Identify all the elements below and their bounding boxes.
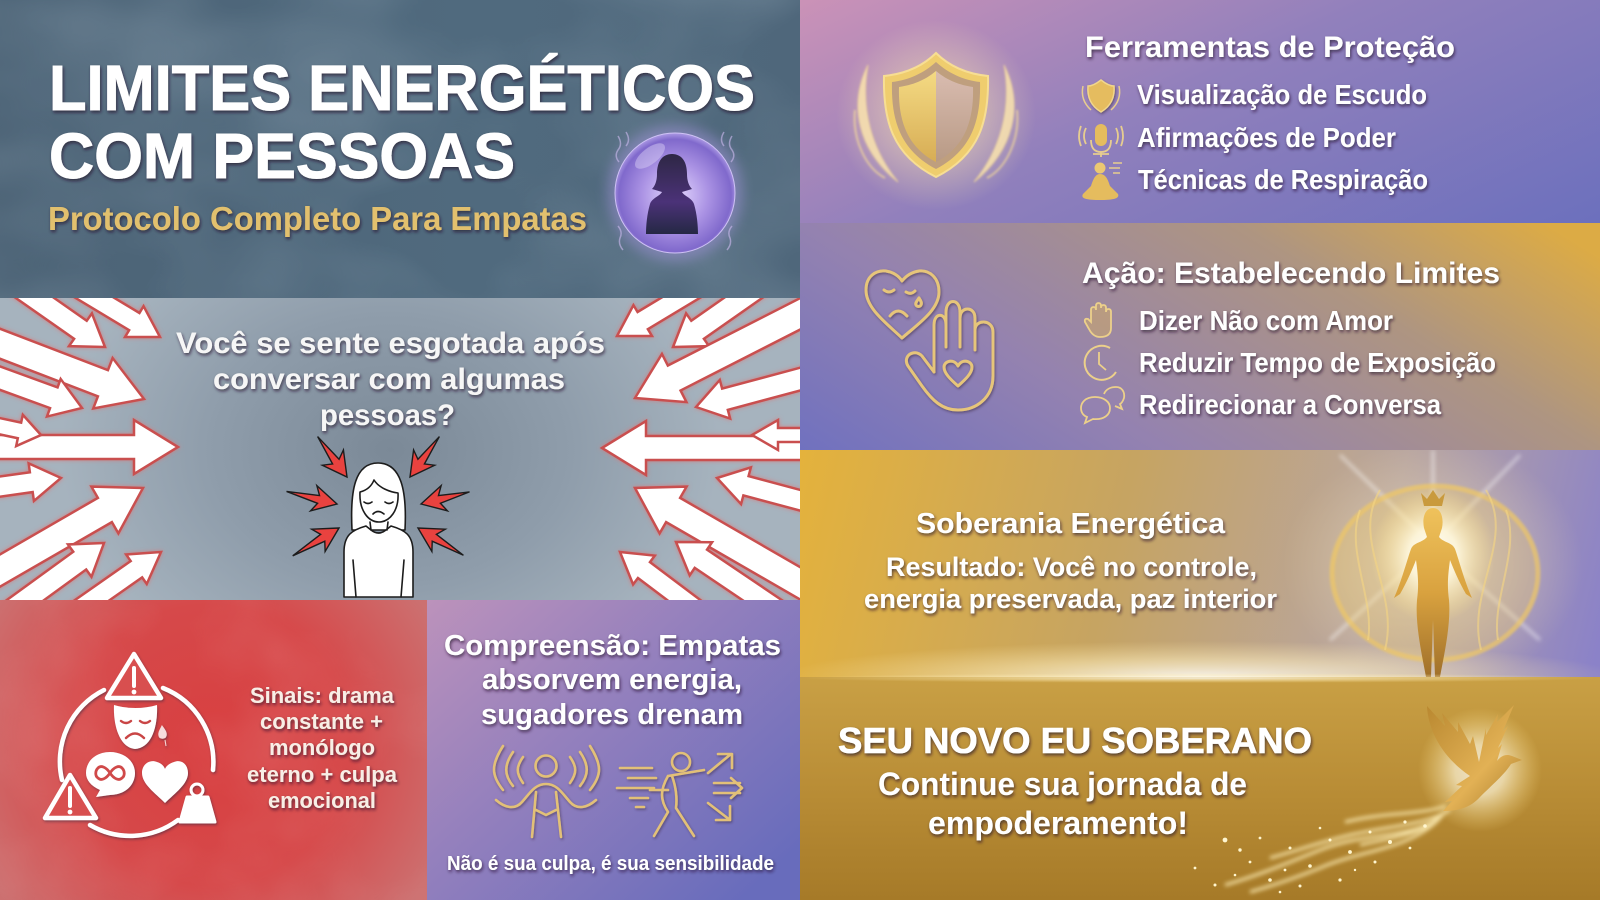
panel: understanding	[427, 600, 800, 900]
arrows incoming from the right	[600, 298, 800, 600]
action: redirect the conversation	[1081, 387, 1441, 423]
sovereignty text	[864, 508, 1277, 614]
sovereignty text: Resultado: Você no controle,	[886, 552, 1257, 582]
understanding heading	[444, 630, 781, 731]
panel: energy drain question	[0, 298, 800, 600]
signs text: constante +	[260, 709, 383, 734]
signs text: Sinais: drama	[250, 683, 395, 708]
action: say no with love: Dizer Não com Amor	[1139, 305, 1393, 336]
tools heading: Ferramentas de Proteção	[1085, 31, 1455, 64]
action: reduce exposure time: Reduzir Tempo de Exposição	[1139, 347, 1496, 378]
subtitle: Protocolo Completo Para Empatas	[48, 200, 587, 237]
tool: power affirmations: Afirmações de Poder	[1137, 122, 1396, 153]
signs text: emocional	[268, 788, 376, 813]
question text: conversar com algumas	[213, 363, 565, 396]
action heading: Ação: Estabelecendo Limites	[1082, 257, 1500, 290]
action: redirect the conversation: Redirecionar a Conversa	[1139, 389, 1441, 420]
final message: empoderamento!	[928, 805, 1188, 841]
caption: Não é sua culpa, é sua sensibilidade	[447, 853, 774, 875]
icon: drainer pulling energy	[617, 753, 742, 836]
understanding heading: sugadores drenam	[481, 699, 743, 731]
sovereignty text: Soberania Energética	[916, 508, 1226, 540]
icon: sad heart and open hand	[866, 271, 993, 410]
panel: header	[0, 0, 800, 298]
panel: energetic sovereignty	[800, 450, 1600, 677]
signs text	[247, 683, 398, 813]
title: COM PESSOAS	[49, 120, 515, 192]
question text: pessoas?	[320, 399, 455, 432]
signs text: monólogo	[269, 735, 375, 760]
icon: person in protective bubble	[607, 125, 743, 261]
final message: Continue sua jornada de	[878, 766, 1247, 802]
panel: warning signs	[0, 600, 427, 900]
icon: exhausted woman	[344, 463, 413, 597]
icon: red arrows around woman	[283, 429, 473, 567]
icon: energy trail	[1194, 806, 1450, 893]
sovereignty text: energia preservada, paz interior	[864, 584, 1277, 614]
title: LIMITES ENERGÉTICOS	[49, 52, 755, 124]
tool: breathing techniques	[1082, 162, 1428, 200]
final message	[878, 766, 1247, 841]
icon: golden dove	[1427, 705, 1522, 811]
panel: final call to action	[800, 677, 1600, 900]
panel: protection tools	[800, 0, 1600, 223]
icon: golden shield	[836, 20, 1036, 210]
icon: empath absorbing energy	[494, 746, 599, 837]
final heading: SEU NOVO EU SOBERANO	[838, 720, 1312, 761]
question text: Você se sente esgotada após	[176, 327, 605, 360]
tool: shield visualization: Visualização de Escudo	[1137, 79, 1427, 110]
understanding heading: Compreensão: Empatas	[444, 630, 781, 662]
arrows incoming from the left	[0, 298, 180, 600]
tool: breathing techniques: Técnicas de Respiração	[1138, 164, 1428, 195]
signs text: eterno + culpa	[247, 762, 398, 787]
title	[49, 52, 755, 192]
icon: warning cycle	[45, 654, 215, 836]
understanding heading: absorvem energia,	[482, 664, 742, 696]
glowing horizon	[800, 673, 1600, 683]
question text	[176, 327, 605, 432]
tool: power affirmations	[1079, 122, 1396, 157]
icon: crowned figure with aura	[1314, 450, 1561, 677]
panel: action setting limits	[800, 223, 1600, 450]
